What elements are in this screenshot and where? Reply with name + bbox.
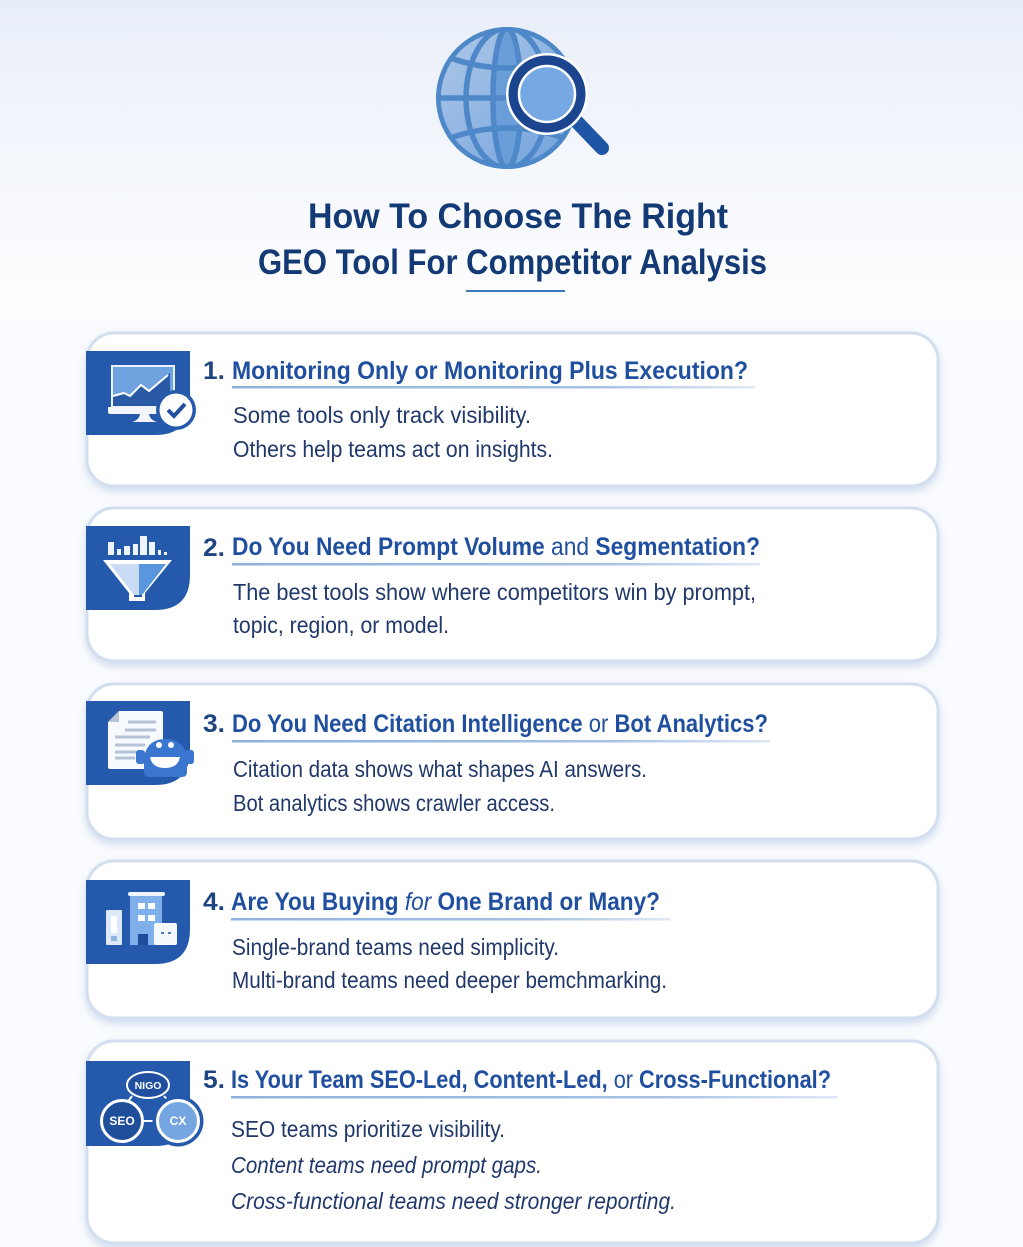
body text [233,402,553,462]
icon: office buildings [86,880,190,964]
heading: 2. [203,534,225,562]
icon: monitor with check badge [86,351,196,435]
panel: question 3 [86,684,938,839]
icon: team venn nodes: SEO [109,1114,135,1128]
body text: Cross-functional teams need stronger reporting. [231,1188,676,1214]
title: GEO Tool For Competitor Analysis [258,243,767,282]
icon: team venn nodes: CX [170,1114,186,1128]
title [258,197,767,282]
heading: 1. [203,357,225,385]
heading: Monitoring Only or Monitoring Plus Execution? [232,357,748,385]
body text: Content teams need prompt gaps. [231,1152,542,1178]
heading: 3. [203,710,225,738]
icon: bars over funnel [86,526,190,610]
title: How To Choose The Right [308,197,728,236]
body text: Multi-brand teams need deeper bemchmarking. [232,967,667,993]
heading: Is Your Team SEO-Led, Content-Led, or Cross-Functional? [231,1066,831,1094]
heading: Do You Need Prompt Volume and Segmentation? [232,533,760,561]
icon: team venn nodes [86,1061,204,1146]
body text: Some tools only track visibility. [233,402,531,428]
card background [87,1041,938,1243]
icon: document with robot [86,701,194,785]
body text: Single-brand teams need simplicity. [232,934,559,960]
card background [87,333,938,486]
panel: question 5 [86,1041,938,1243]
card background [87,861,938,1018]
body text [233,756,647,816]
panel: question 4 [86,861,938,1018]
body text: Bot analytics shows crawler access. [233,790,555,816]
card background [87,684,938,839]
heading: Are You Buying for One Brand or Many? [231,888,660,916]
heading: 4. [203,888,225,916]
card background [87,508,938,661]
body text: The best tools show where competitors win by prompt, [233,579,756,605]
globe [436,27,578,169]
body text [231,1116,676,1214]
body text [233,579,756,638]
icon: team venn nodes: NIGO [135,1080,161,1092]
body text: topic, region, or model. [233,612,449,638]
body text [232,934,667,993]
heading: 5. [203,1066,225,1094]
body text: Others help teams act on insights. [233,436,553,462]
body text: Citation data shows what shapes AI answers. [233,756,647,782]
magnifying glass [506,53,602,148]
body text: SEO teams prioritize visibility. [231,1116,505,1142]
panel: question 1 [86,333,938,486]
panel: question 2 [86,508,938,661]
icon: globe with magnifying glass [436,27,602,169]
heading: Do You Need Citation Intelligence or Bot Analytics? [232,710,768,738]
